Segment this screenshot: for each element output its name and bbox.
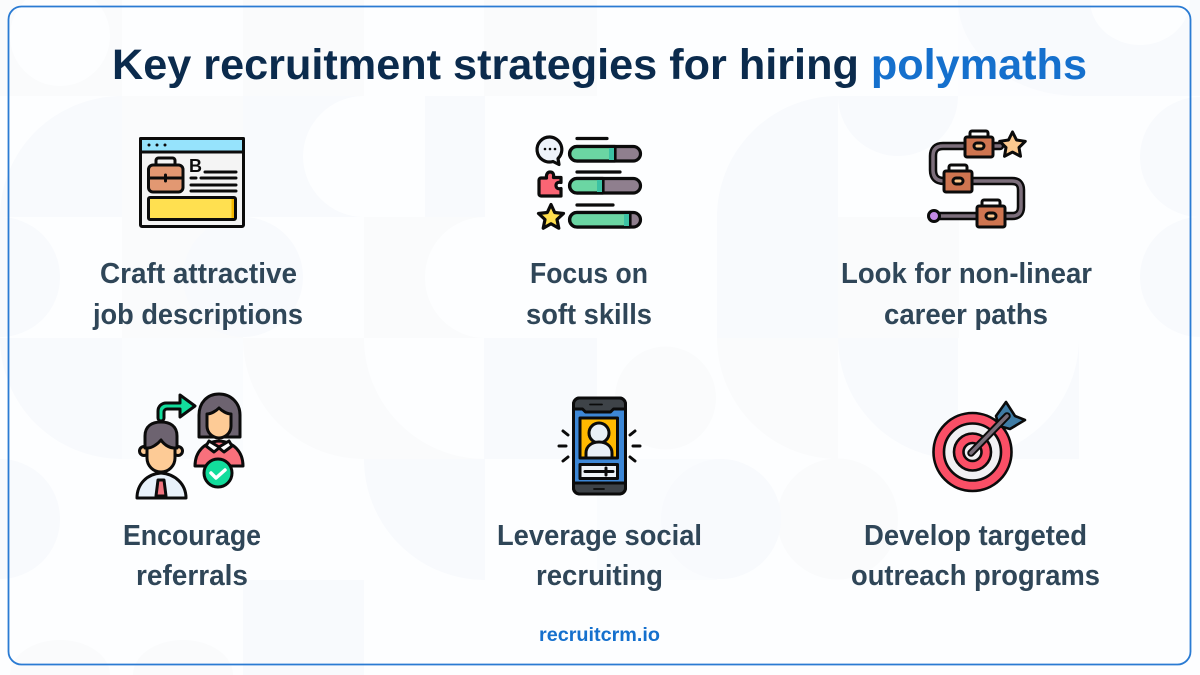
title: Key recruitment strategies for hiring polymaths <box>112 41 1087 89</box>
icon: referral people <box>137 394 243 498</box>
icon: job description window <box>140 138 244 226</box>
icon: smartphone profile <box>559 398 640 494</box>
heading: develop targeted outreach programs: Develop targeted <box>864 520 1087 552</box>
heading: develop targeted outreach programs <box>851 520 1100 592</box>
heading: encourage referrals: Encourage <box>123 520 261 552</box>
icon: target with arrow <box>934 402 1025 491</box>
heading: look for non-linear career paths <box>841 258 1092 331</box>
heading: encourage referrals: referrals <box>136 560 248 592</box>
heading: focus on soft skills: Focus on <box>530 258 648 290</box>
heading: look for non-linear career paths: Look for non-linear <box>841 258 1092 290</box>
heading: leverage social recruiting: recruiting <box>536 560 663 592</box>
icon: non-linear career path <box>928 131 1025 227</box>
heading: encourage referrals <box>123 520 261 592</box>
icon: soft skills bars <box>537 137 640 228</box>
heading: look for non-linear career paths: career paths <box>884 299 1048 331</box>
heading: craft attractive job descriptions: Craft attractive <box>100 258 297 290</box>
icon: job description window: B <box>189 155 202 176</box>
heading: craft attractive job descriptions: job descriptions <box>92 299 303 331</box>
heading: leverage social recruiting: Leverage social <box>497 520 702 552</box>
heading: craft attractive job descriptions <box>92 258 303 331</box>
heading: leverage social recruiting <box>497 520 702 592</box>
heading: develop targeted outreach programs: outreach programs <box>851 560 1100 592</box>
heading: focus on soft skills: soft skills <box>526 299 652 331</box>
heading: focus on soft skills <box>526 258 652 331</box>
brand url: recruitcrm.io <box>539 624 660 646</box>
